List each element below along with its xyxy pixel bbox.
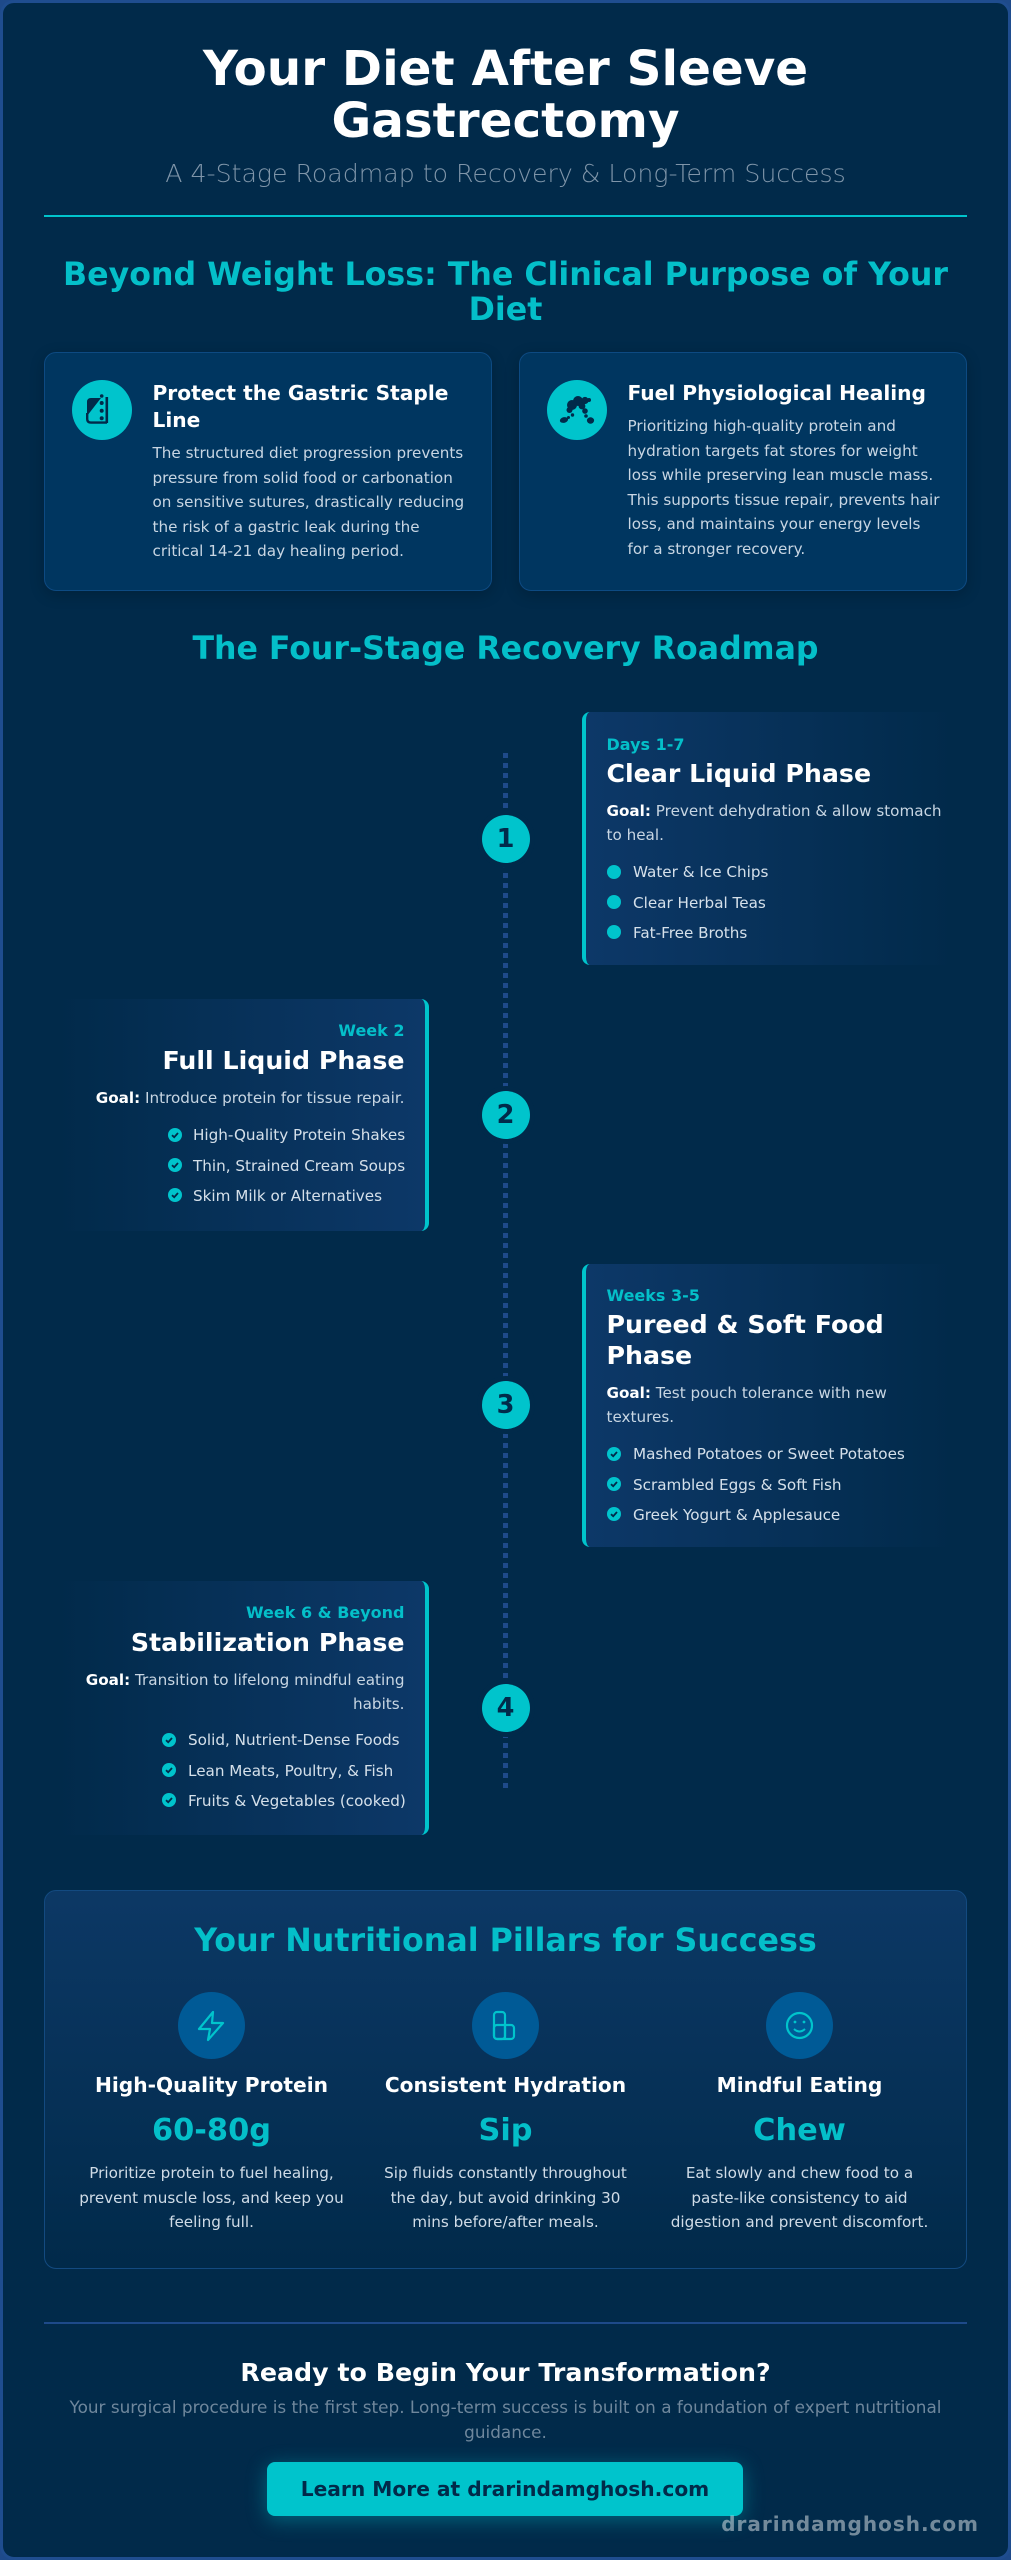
footer heading: Ready to Begin Your Transformation? [240,2358,771,2387]
stage title: Stabilization Phase [131,1628,404,1657]
icon: bolt [178,1992,245,2059]
stage 2 [96,999,530,1231]
pillar name: Mindful Eating [717,2073,882,2097]
goal [606,1384,887,1426]
card body: the risk of a gastric leak during the [152,518,420,536]
card body [627,417,940,558]
food list: Mashed Potatoes or Sweet Potatoes [633,1445,905,1463]
icon: staple line [72,380,132,440]
goal: Goal: Transition to lifelong mindful eating [86,1671,404,1689]
node 4: 4 [497,1693,514,1723]
node 3: 3 [497,1390,514,1420]
goal: to heal. [606,826,664,844]
node 2 [482,1091,530,1139]
heading: clinical purpose [63,257,948,328]
food list: Lean Meats, Poultry, & Fish [188,1762,393,1780]
food list [607,863,768,942]
button [267,2462,743,2516]
card body [152,444,464,560]
pillar text [671,2164,928,2231]
card body: hydration targets fat stores for weight [628,442,918,460]
pillar value: 60-80g [152,2113,271,2148]
panel: nutritional pillars [44,1890,967,2269]
card body: on sensitive sutures, drastically reducing [152,493,464,511]
stage title: Clear Liquid Phase [606,759,871,788]
icon: healing nodes [547,380,607,440]
duration: Days 1-7 [606,735,685,754]
food list: Scrambled Eggs & Soft Fish [633,1476,841,1494]
node 2: 2 [497,1100,514,1130]
footer text [70,2397,941,2442]
card body: The structured diet progression prevents [152,444,463,462]
food list: Thin, Strained Cream Soups [193,1156,405,1174]
pillar text [79,2164,344,2231]
panel: fuel healing [519,352,967,594]
card body: pressure from solid food or carbonation [152,469,453,487]
pillar text: the day, but avoid drinking 30 [391,2188,620,2206]
card heading: Line [152,408,200,432]
food list: Water & Ice Chips [633,863,768,881]
node 3 [482,1381,530,1429]
pillar text: mins before/after meals. [412,2213,599,2231]
card body: Prioritizing high-quality protein and [628,417,896,435]
title: Your Diet After Sleeve [203,40,808,96]
pillar: mindful eating [671,1992,928,2231]
card body: This supports tissue repair, prevents hair [628,491,939,509]
footer text: Your surgical procedure is the first step. Long-term success is built on a foundation of expert nutritional [70,2397,941,2417]
stage title: Pureed & Soft Food [606,1310,884,1339]
stage title: Full Liquid Phase [162,1046,404,1075]
duration: Week 6 & Beyond [246,1603,404,1622]
footer text: guidance. [464,2422,547,2442]
goal: textures. [606,1408,674,1426]
title: Gastrectomy [331,93,680,149]
pillar text: Sip fluids constantly throughout [384,2164,627,2182]
button: Learn More at drarindamghosh.com [301,2477,709,2501]
icon: bottle [472,1992,539,2059]
food list: Skim Milk or Alternatives [193,1186,382,1204]
food list: Fruits & Vegetables (cooked) [188,1792,406,1810]
food list: Greek Yogurt & Applesauce [633,1506,840,1524]
card heading: Fuel Physiological Healing [628,381,926,405]
icon: smile [766,1992,833,2059]
pillar: hydration [384,1992,627,2231]
pillar text: prevent muscle loss, and keep you [79,2188,344,2206]
pillar name: High-Quality Protein [95,2073,328,2097]
pillar value: Sip [478,2113,533,2148]
node 1 [482,815,530,863]
pillar value: Chew [753,2113,846,2148]
stage 1 [482,712,942,965]
node 1: 1 [497,824,514,854]
food list: Solid, Nutrient-Dense Foods [188,1731,400,1749]
food list [162,1731,406,1810]
food list: High-Quality Protein Shakes [193,1126,405,1144]
stage title: Phase [606,1341,692,1370]
pillars heading: Your Nutritional Pillars for Success [194,1923,817,1959]
pillar name: Consistent Hydration [385,2073,626,2097]
goal: Goal: Test pouch tolerance with new [606,1384,887,1402]
heading: roadmap: The Four-Stage Recovery Roadmap [192,631,819,667]
card heading [152,381,448,432]
heading: clinical purpose: Diet [469,292,542,328]
card body: for a stronger recovery. [628,540,805,558]
goal [606,802,942,844]
node 4 [482,1684,530,1732]
goal: habits. [353,1695,404,1713]
card body: loss, and maintains your energy levels [628,515,920,533]
pillar text: paste-like consistency to aid [691,2188,908,2206]
subtitle: A 4-Stage Roadmap to Recovery & Long-Term Success [165,159,846,188]
food list [168,1126,405,1204]
pillar text: digestion and prevent discomfort. [671,2213,928,2231]
food list [607,1445,905,1524]
goal [86,1671,404,1713]
heading: clinical purpose: Beyond Weight Loss: The Clinical Purpose of Your [63,257,948,293]
pillar text: Prioritize protein to fuel healing, [89,2164,334,2182]
duration: Weeks 3-5 [606,1286,700,1305]
title [202,40,808,149]
card body: loss while preserving lean muscle mass. [628,466,933,484]
stage 3 [482,1264,905,1547]
pillar: protein [79,1992,344,2231]
card body: critical 14-21 day healing period. [152,542,404,560]
food list: Clear Herbal Teas [633,894,766,912]
pillar text: Eat slowly and chew food to a [686,2164,913,2182]
goal: Goal: Introduce protein for tissue repair. [96,1089,404,1107]
watermark: drarindamghosh.com [721,2512,979,2536]
pillar text: feeling full. [169,2213,254,2231]
pillar text [384,2164,627,2231]
food list: Fat-Free Broths [633,924,747,942]
goal: Goal: Prevent dehydration & allow stomach [606,802,942,820]
panel: protect staple line [44,352,492,594]
stage 4 [86,1581,530,1835]
card heading: Protect the Gastric Staple [152,381,448,405]
stage title [606,1310,884,1370]
duration: Week 2 [338,1021,404,1040]
